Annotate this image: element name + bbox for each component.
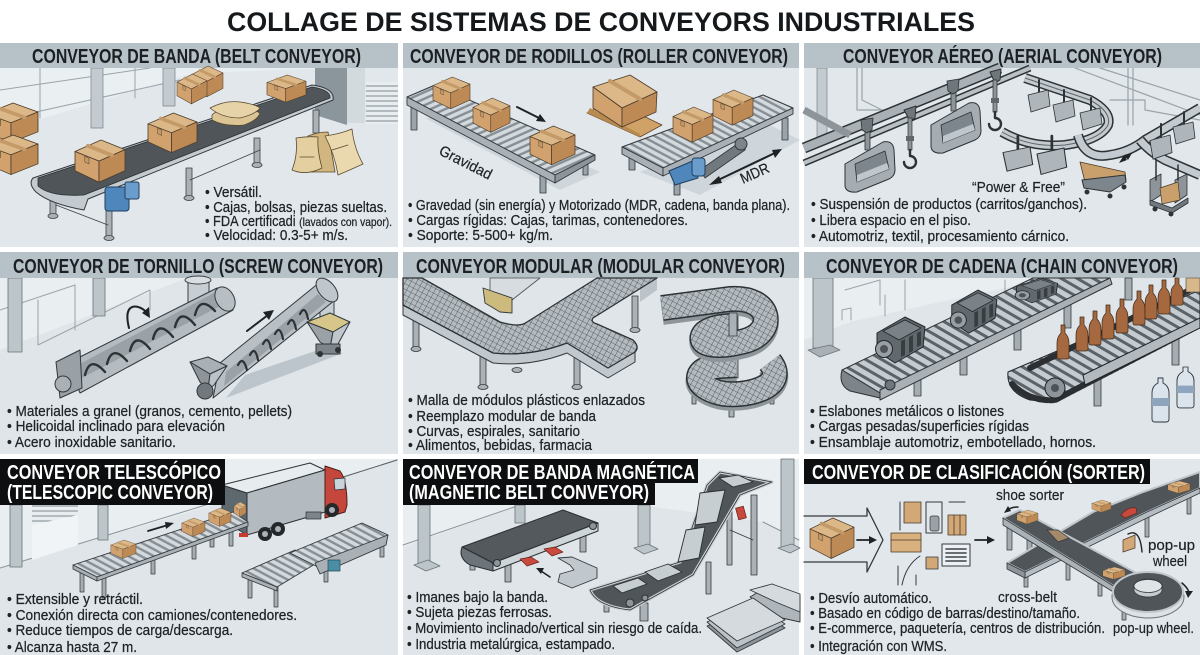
bullet list: • Malla de módulos plásticos enlazados: [408, 392, 645, 409]
magnets: [520, 547, 563, 566]
header band: CONVEYOR DE RODILLOS (ROLLER CONVEYOR): [410, 46, 788, 68]
MDR conveyor: [622, 95, 800, 195]
arrow: [536, 568, 550, 577]
arrow: [857, 536, 877, 544]
stacked boxes left: [0, 103, 38, 175]
boxes at far end: [1186, 278, 1200, 292]
bullet list: • Cajas, bolsas, piezas sueltas.: [205, 199, 387, 216]
arrow: [148, 522, 174, 531]
cart with boxes: [1080, 162, 1126, 198]
MDR boxes: [673, 90, 753, 142]
incline belt: [590, 472, 772, 610]
bullet list: [205, 184, 392, 244]
carriers: [1003, 80, 1195, 174]
stacked boxes background: [177, 66, 223, 104]
bullet list: • Eslabones metálicos o listones: [810, 403, 1004, 420]
red part: [736, 506, 746, 520]
input box: [810, 518, 854, 558]
bullet list: • Curvas, espirales, sanitario: [408, 423, 580, 440]
steel sheets stack: [707, 584, 800, 652]
cart hanging: [1150, 160, 1188, 216]
carousel: [1112, 572, 1184, 618]
bullet list: • Movimiento inclinado/vertical sin riesgo de caída.: [407, 620, 702, 637]
shadow of inclined screw: [226, 350, 343, 398]
labels: pop-up: [1148, 538, 1195, 554]
arrow: [247, 310, 274, 331]
header band: CONVEYOR DE BANDA (BELT CONVEYOR): [32, 46, 361, 68]
bullet list: [408, 392, 645, 454]
bullet list: • FDA certificadi (lavados con vapor).: [205, 213, 392, 230]
label: gravidad: Gravidad: [436, 142, 495, 183]
panel: screw conveyor: [0, 252, 398, 454]
labels: wheel: [1152, 554, 1187, 570]
header band: CONVEYOR DE TORNILLO (SCREW CONVEYOR): [13, 256, 383, 278]
packages on belts: [1017, 481, 1190, 579]
bullet list: • Imanes bajo la banda.: [407, 589, 548, 606]
bullet list: • Cargas rígidas: Cajas, tarimas, contenedores.: [408, 212, 688, 229]
panel: roller conveyor: [403, 43, 800, 247]
boxes on belt: [75, 75, 306, 182]
bullet list: • Acero inoxidable sanitario.: [7, 434, 176, 451]
outlet hopper: [307, 313, 350, 357]
gravity conveyor: [407, 85, 600, 193]
bullet list: [408, 197, 790, 244]
sacks on floor: [292, 129, 363, 175]
header block black: [403, 459, 698, 505]
panel: belt conveyor: [0, 43, 398, 247]
panel: sorter conveyor: [804, 459, 1200, 655]
bullet list: [810, 590, 1105, 655]
feed chute: [483, 278, 540, 313]
big outline arrow: [804, 508, 883, 572]
bullet list: • Gravedad (sin energía) y Motorizado (MDR, cadena, banda plana).: [408, 197, 790, 214]
bullet list: • Alimentos, bebidas, farmacia: [408, 437, 593, 454]
sacks on belt: [210, 102, 260, 125]
bullet list: [7, 591, 297, 655]
bullet list: • Materiales a granel (granos, cemento, pellets): [7, 403, 292, 420]
header band: [403, 252, 799, 278]
bullet list: • Reduce tiempos de carga/descarga.: [7, 622, 233, 639]
pallet and large box: [587, 75, 662, 137]
bullet list: • Industria metalúrgica, estampado.: [407, 636, 615, 653]
bullet list: • Soporte: 5-500+ kg/m.: [408, 227, 553, 244]
bullet list: • Libera espacio en el piso.: [811, 212, 971, 229]
cross belt: [1007, 472, 1200, 578]
arrow: [517, 107, 546, 122]
bullet list: • Integración con WMS.: [810, 638, 947, 655]
bullet list: [7, 403, 292, 451]
pillars: [414, 459, 800, 571]
double arrow: [1119, 153, 1132, 163]
second telescopic conveyor: [242, 523, 388, 607]
bullet list: • Desvío automático.: [810, 590, 932, 607]
bullet list: • Extensible y retráctil.: [7, 591, 143, 608]
rotation arrow: [127, 307, 150, 328]
bullet list: [810, 403, 1096, 451]
pop-up wheel box: [1123, 533, 1142, 552]
double arrow: [709, 149, 782, 185]
labels: cross-belt: [998, 590, 1057, 606]
main curved modular belt: [403, 278, 657, 378]
panel: aerial conveyor: [804, 43, 1200, 247]
incline belt legs: [604, 495, 757, 621]
power and free track: [1002, 78, 1200, 175]
chain conveyor: [1008, 285, 1200, 406]
roller conveyor with engines: [841, 278, 1132, 400]
bullet list: • Cargas pesadas/superficies rígidas: [810, 418, 1029, 435]
labels: shoe sorter: [996, 488, 1064, 504]
belt: [31, 85, 333, 210]
labels: [996, 488, 1195, 637]
bullet list: • Ensamblaje automotriz, embotellado, hornos.: [810, 434, 1096, 451]
metal plates on belt: [613, 475, 753, 593]
dock door: [10, 505, 108, 567]
sorter legs: [1007, 497, 1191, 620]
ferrous part: [558, 557, 597, 588]
sorting icons: [891, 502, 970, 585]
motor: [669, 158, 705, 185]
header block black: CONVEYOR DE BANDA MAGNÉTICA: [409, 461, 695, 484]
short magnetic belt: [461, 510, 598, 582]
motor: [105, 182, 139, 211]
header block black: CONVEYOR TELESCÓPICO: [7, 460, 221, 484]
legs: [411, 296, 640, 390]
title: COLLAGE DE SISTEMAS DE CONVEYORS INDUSTRIALES: [227, 7, 975, 37]
header band: CONVEYOR MODULAR (MODULAR CONVEYOR): [416, 256, 785, 278]
bullet list: • E-commerce, paquetería, centros de distribución.: [810, 620, 1105, 637]
arrow: [975, 536, 995, 544]
bullet list: • Conexión directa con camiones/contenedores.: [7, 607, 297, 624]
panel: magnetic belt conveyor: [403, 459, 800, 655]
inclined screw: [213, 274, 342, 398]
bullet list: • Suspensión de productos (carritos/ganchos).: [811, 196, 1087, 213]
water bottles: [1152, 367, 1194, 422]
label: MDR: MDR: [738, 160, 772, 188]
bullet list: • Basado en código de barras/destino/tamaño.: [810, 605, 1080, 622]
shoe sorter belt: [1003, 510, 1140, 596]
bucket hangers: [845, 79, 981, 192]
engines: [876, 278, 1058, 363]
legs: [48, 110, 319, 240]
bullet list: • Versátil.: [205, 184, 262, 201]
label: power and free: “Power & Free”: [972, 179, 1065, 196]
header block black: (MAGNETIC BELT CONVEYOR): [409, 482, 649, 504]
bullet list: [407, 589, 702, 653]
panel: telescopic conveyor: [0, 459, 398, 655]
flow arrows: [1004, 506, 1193, 598]
bullet list: • Sujeta piezas ferrosas.: [407, 604, 552, 621]
panel: chain conveyor: [804, 252, 1200, 454]
hooks: [904, 69, 1001, 168]
gravity boxes: [433, 77, 575, 165]
bullet list: • Automotriz, textil, procesamiento cárnico.: [811, 228, 1069, 245]
bullet list: [811, 196, 1087, 245]
panel: modular conveyor: [403, 252, 799, 454]
brown bottles: [1057, 278, 1183, 359]
horizontal screw: [55, 276, 239, 398]
boxes: [111, 502, 246, 558]
bullet list: • Reemplazo modular de banda: [408, 408, 597, 425]
bullet list: • Helicoidal inclinado para elevación: [7, 418, 225, 435]
truck: [222, 463, 347, 541]
telescopic conveyor line: [73, 512, 248, 598]
header band: [0, 252, 398, 278]
header block black: [0, 459, 225, 505]
header block black: (TELESCOPIC CONVEYOR): [7, 482, 213, 504]
spiral conveyor: [662, 299, 775, 417]
bullet list: • Velocidad: 0.3-5+ m/s.: [205, 227, 348, 244]
main overhead rail: [804, 68, 1030, 163]
inlet hopper: [190, 357, 227, 399]
